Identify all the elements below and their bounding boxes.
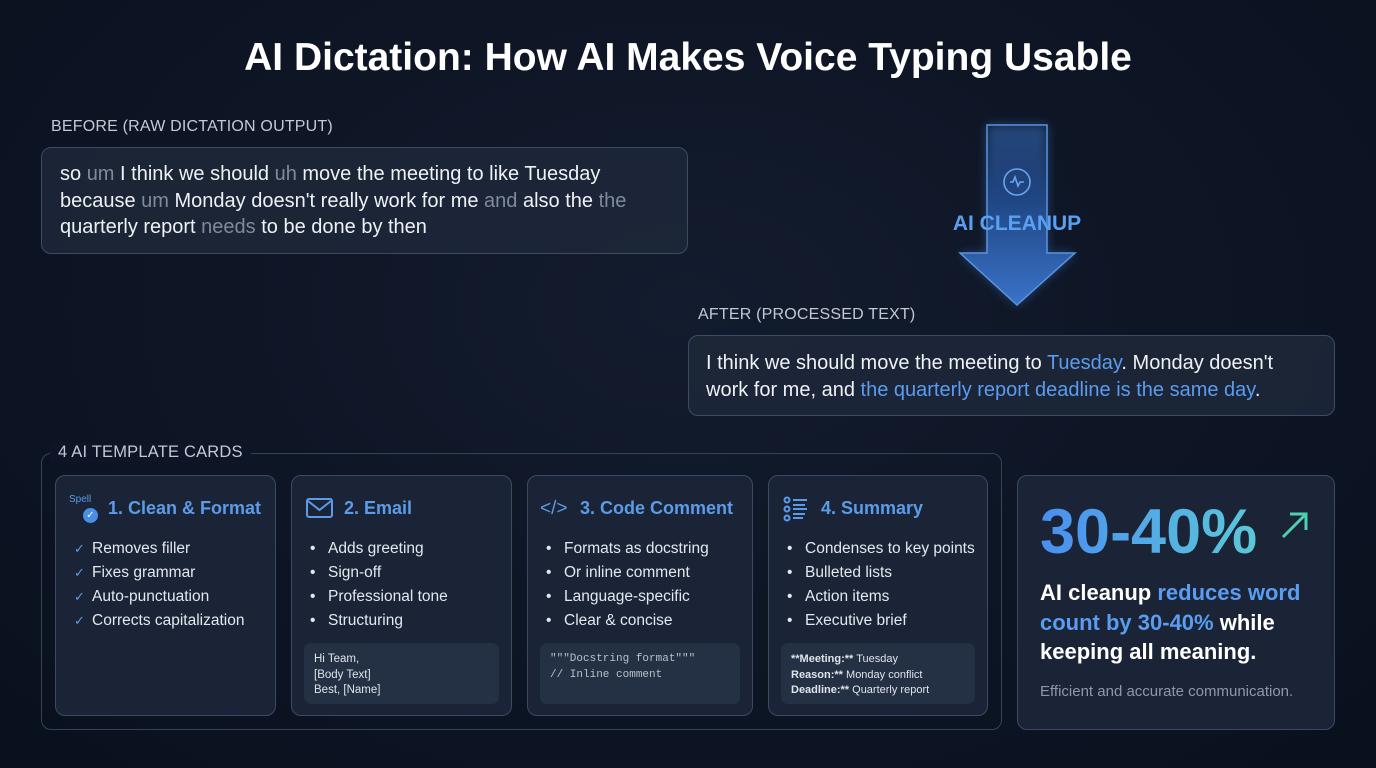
- after box: I think we should move the meeting to Tuesday. Monday doesn't work for me, and the quarterly report deadline is the same day.: [706, 352, 1273, 400]
- card 4: Deadline:** Quarterly report: [791, 684, 929, 696]
- card 3: [527, 475, 753, 716]
- card 2: Structuring: [328, 612, 403, 629]
- card 1: 1. Clean & Format: [108, 498, 261, 518]
- card 3: Clear & concise: [564, 612, 673, 629]
- icon: email: [306, 498, 333, 518]
- card 3: """Docstring format""": [550, 653, 695, 665]
- templates frame: [41, 453, 1002, 730]
- stat text: AI cleanup reduces word count by 30-40% while keeping all meaning.: [1040, 580, 1300, 664]
- text: AI CLEANUP: [953, 212, 1081, 235]
- card 4: Bulleted lists: [805, 564, 892, 581]
- card 4: **Meeting:** Tuesday: [791, 653, 898, 665]
- subtext: Efficient and accurate communication.: [1040, 683, 1293, 700]
- big stat: 30-40%: [1040, 497, 1257, 567]
- icon: spell check: ✓: [86, 510, 95, 521]
- icon: spell check: Spell: [69, 494, 91, 505]
- card 4: Executive brief: [805, 612, 907, 629]
- icon: gear: [1004, 169, 1030, 195]
- card 3: Formats as docstring: [564, 540, 709, 557]
- card 2: 2. Email: [344, 498, 412, 518]
- after box: [688, 335, 1335, 416]
- card 1: Fixes grammar: [92, 564, 195, 581]
- before box: so um I think we should uh move the meeting to like Tuesday because um Monday doesn't really work for me and also the the quarterly report needs to be done by then: [60, 163, 626, 238]
- card 4: Action items: [805, 588, 889, 605]
- card 3: Language-specific: [564, 588, 690, 605]
- before label: BEFORE (RAW DICTATION OUTPUT): [51, 118, 333, 135]
- after label: AFTER (PROCESSED TEXT): [698, 306, 915, 323]
- card 4: [768, 475, 988, 716]
- card 2: [291, 475, 512, 716]
- card 2: Professional tone: [328, 588, 448, 605]
- card 3: 3. Code Comment: [580, 498, 733, 518]
- card 1: Corrects capitalization: [92, 612, 244, 629]
- icon: code: </>: [540, 498, 567, 519]
- before box: [41, 147, 688, 254]
- card 1: [55, 475, 276, 716]
- card 2: Adds greeting: [328, 540, 424, 557]
- arrow: AI cleanup: [953, 119, 1081, 308]
- card 3: // Inline comment: [550, 668, 662, 680]
- stats card: [1017, 475, 1335, 730]
- card 2: Best, [Name]: [314, 684, 380, 696]
- card 2: Sign-off: [328, 564, 381, 581]
- card 4: Condenses to key points: [805, 540, 975, 557]
- card 4: 4. Summary: [821, 498, 923, 518]
- card 3: Or inline comment: [564, 564, 690, 581]
- templates label: 4 AI TEMPLATE CARDS: [58, 443, 243, 461]
- icon: up arrow: [1282, 512, 1308, 538]
- title: AI Dictation: How AI Makes Voice Typing Usable: [244, 36, 1132, 79]
- card 1: Auto-punctuation: [92, 588, 209, 605]
- icon: spell check: [69, 494, 98, 523]
- card 2: [Body Text]: [314, 668, 371, 680]
- card 1: Removes filler: [92, 540, 190, 557]
- card 4: Reason:** Monday conflict: [791, 668, 922, 680]
- icon: list: [784, 496, 807, 522]
- card 2: Hi Team,: [314, 653, 359, 665]
